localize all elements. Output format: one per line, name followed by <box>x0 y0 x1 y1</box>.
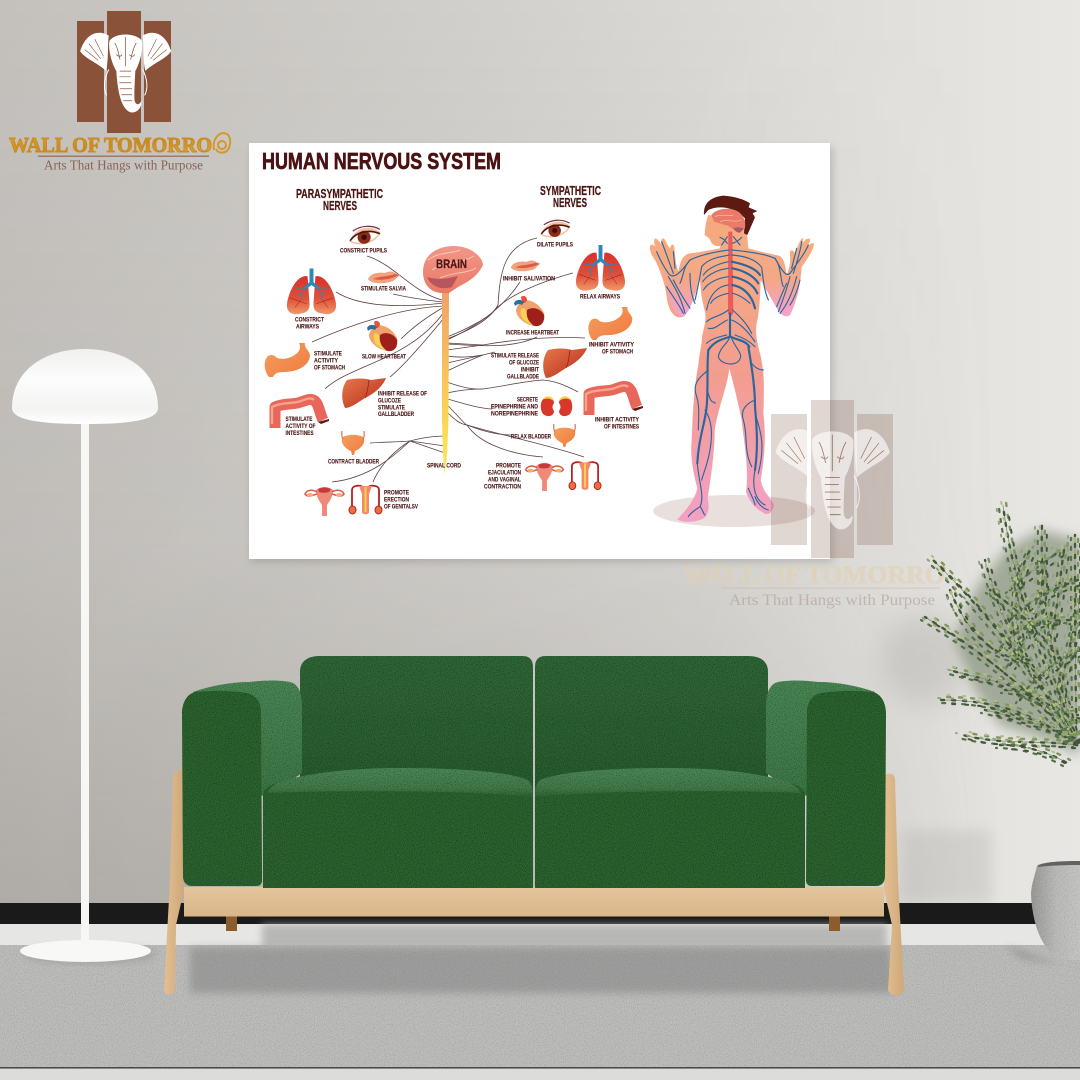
organ: slow heartbeat: SLOW HEARTBEAT <box>362 354 406 360</box>
heading: sympathetic nerves: NERVES <box>553 196 587 210</box>
organ: inhibit glucose: STIMULATE <box>378 404 405 412</box>
heading: parasympathetic nerves: PARASYMPATHETIC <box>296 187 383 201</box>
heading: sympathetic nerves <box>540 184 601 210</box>
organ: stimulate glucose: GALLBLADDE <box>507 374 539 380</box>
organ: dilate pupils <box>537 220 573 248</box>
organ: promote ejaculation: CONTRACTION <box>484 484 521 490</box>
watermark text <box>683 562 945 609</box>
poster panel <box>249 143 830 559</box>
rug <box>0 945 1080 1080</box>
logo bars <box>77 11 171 133</box>
brain in head <box>711 209 745 233</box>
hair <box>704 196 757 235</box>
organ: stimulate intestines: INTESTINES <box>286 430 314 437</box>
sofa wood legs and frame <box>164 770 904 995</box>
organ: promote erection: ERECTION <box>384 496 409 504</box>
organ: secrete epinephrine: SECRETE <box>517 396 538 404</box>
organ: stimulate salvia <box>361 272 406 292</box>
plant pot <box>1005 861 1080 965</box>
watermark bars <box>771 400 893 558</box>
organ: promote ejaculation: AND VAGINAL <box>488 476 521 484</box>
organ: stimulate stomach: OF STOMACH <box>314 364 345 372</box>
organ: stimulate intestines: STIMULATE <box>286 416 313 423</box>
organ: stimulate glucose: OF GLUCOZE <box>509 360 539 366</box>
human figure with nerves <box>650 196 814 522</box>
heading: parasympathetic nerves <box>296 187 383 213</box>
watermark <box>771 400 893 558</box>
organ: contract bladder: CONTRACT BLADDER <box>328 458 379 466</box>
organ: stimulate intestines <box>272 398 329 437</box>
organ: stimulate stomach: ACTIVITY <box>314 358 338 364</box>
organ: inhibit glucose: GLUCOZE <box>378 398 401 404</box>
abdominal nerves <box>707 310 755 364</box>
left half of sofa <box>182 656 533 888</box>
organ: stimulate intestines: ACTIVITY OF <box>286 423 316 430</box>
organ: slow heartbeat <box>362 321 406 360</box>
organ: promote erection: OF GENITALSV <box>384 504 418 510</box>
organ: inhibit stomach: INHIBIT AVTIVITY <box>589 342 634 348</box>
organ: inhibit stomach: OF STOMACH <box>602 348 633 356</box>
organ: constrict airways <box>287 268 336 330</box>
organ: inhibit glucose: GALLBLADDER <box>378 411 414 418</box>
watermark text: WALL OF TOMORRO <box>683 562 945 589</box>
heading: parasympathetic nerves: NERVES <box>323 199 357 213</box>
floor lamp <box>12 349 158 963</box>
organ: secrete epinephrine: NOREPINEPHRINE <box>491 410 538 418</box>
organ: relax bladder: RELAX BLADDER <box>511 434 551 440</box>
organ: inhibit intestines: INHIBIT ACTIVITY <box>595 416 639 424</box>
torso nerves <box>680 237 783 310</box>
plant foliage mass <box>955 530 1080 755</box>
organ: constrict pupils: CONSTRICT PUPILS <box>340 248 387 254</box>
baseboard <box>0 903 1080 924</box>
organ: secrete epinephrine: EPINEPHRINE AND <box>491 404 538 410</box>
poster title: HUMAN NERVOUS SYSTEM <box>262 148 501 174</box>
organ: relax bladder <box>511 424 575 447</box>
plant leaves <box>918 500 1080 767</box>
organ: stimulate stomach: STIMULATE <box>314 350 342 358</box>
ground shadow <box>653 495 815 527</box>
logo elephant <box>80 33 171 112</box>
plant <box>918 500 1080 965</box>
logo rule <box>38 156 209 157</box>
organ: increase heartbeat: INCREASE HEARTBEAT <box>506 330 559 336</box>
sofa <box>164 656 904 995</box>
logo swirl <box>214 133 230 153</box>
organ: inhibit glucose <box>342 378 427 418</box>
organ: stimulate salvia: STIMULATE SALVIA <box>361 286 406 292</box>
organ: dilate pupils: DILATE PUPILS <box>537 242 573 248</box>
label: spinal cord: SPINAL CORD <box>427 462 461 470</box>
organ: promote ejaculation: PROMOTE <box>496 462 521 470</box>
organ: inhibit salivation <box>503 260 555 282</box>
logo wordmark: WALL OF TOMORRO <box>9 133 212 157</box>
lamp stem <box>81 415 89 945</box>
right half of sofa <box>535 656 886 888</box>
logo: Wall of Tomorrow <box>9 11 230 172</box>
elbow pink shading <box>665 280 802 317</box>
body silhouette <box>650 227 814 522</box>
watermark elephant <box>776 429 890 529</box>
organ: secrete epinephrine <box>491 396 572 418</box>
sofa upholstery <box>182 656 886 888</box>
brain label: BRAIN <box>436 257 467 271</box>
leg nerves <box>688 347 768 517</box>
lamp shade <box>12 349 158 424</box>
organ: relax airways: RELAX AIRWAYS <box>580 294 620 300</box>
organ: stimulate glucose <box>491 348 587 380</box>
poster shadow <box>251 147 833 562</box>
spinal cord <box>442 293 449 475</box>
spinal cord red <box>728 232 733 317</box>
organ: stimulate stomach <box>265 343 345 377</box>
organ: promote erection <box>305 486 418 516</box>
floor <box>0 924 1080 1080</box>
organ: contract bladder <box>328 431 379 466</box>
organ: constrict airways: CONSTRICT <box>295 316 324 324</box>
organ: inhibit glucose: INHIBIT RELEASE OF <box>378 390 427 398</box>
organ: constrict pupils <box>340 226 387 254</box>
brain <box>423 246 483 293</box>
organ: inhibit salivation: INHIBIT SALIVATION <box>503 276 555 282</box>
organ: inhibit intestines <box>586 385 643 430</box>
organ: stimulate glucose: STIMULATE RELEASE <box>491 352 539 360</box>
organ: relax airways <box>576 245 625 300</box>
organ: inhibit stomach <box>588 307 634 356</box>
arm nerves <box>657 242 808 313</box>
lamp base <box>20 940 156 963</box>
organ: promote ejaculation <box>484 462 601 491</box>
watermark text: Arts That Hangs with Purpose <box>729 592 935 609</box>
organ: inhibit intestines: OF INTESTINES <box>604 424 639 430</box>
heading: sympathetic nerves: SYMPATHETIC <box>540 184 601 198</box>
logo tagline: Arts That Hangs with Purpose <box>44 158 203 172</box>
sympathetic nerve lines <box>447 238 585 457</box>
organ: increase heartbeat <box>506 296 559 336</box>
organ: constrict airways: AIRWAYS <box>296 324 319 330</box>
face <box>705 215 740 246</box>
plant twigs <box>925 505 1080 763</box>
organ: promote ejaculation: EJACULATION <box>488 470 521 476</box>
organ: stimulate glucose: INHIBIT <box>521 366 539 374</box>
organ: promote erection: PROMOTE <box>384 490 409 496</box>
parasympathetic nerve lines <box>312 256 445 482</box>
